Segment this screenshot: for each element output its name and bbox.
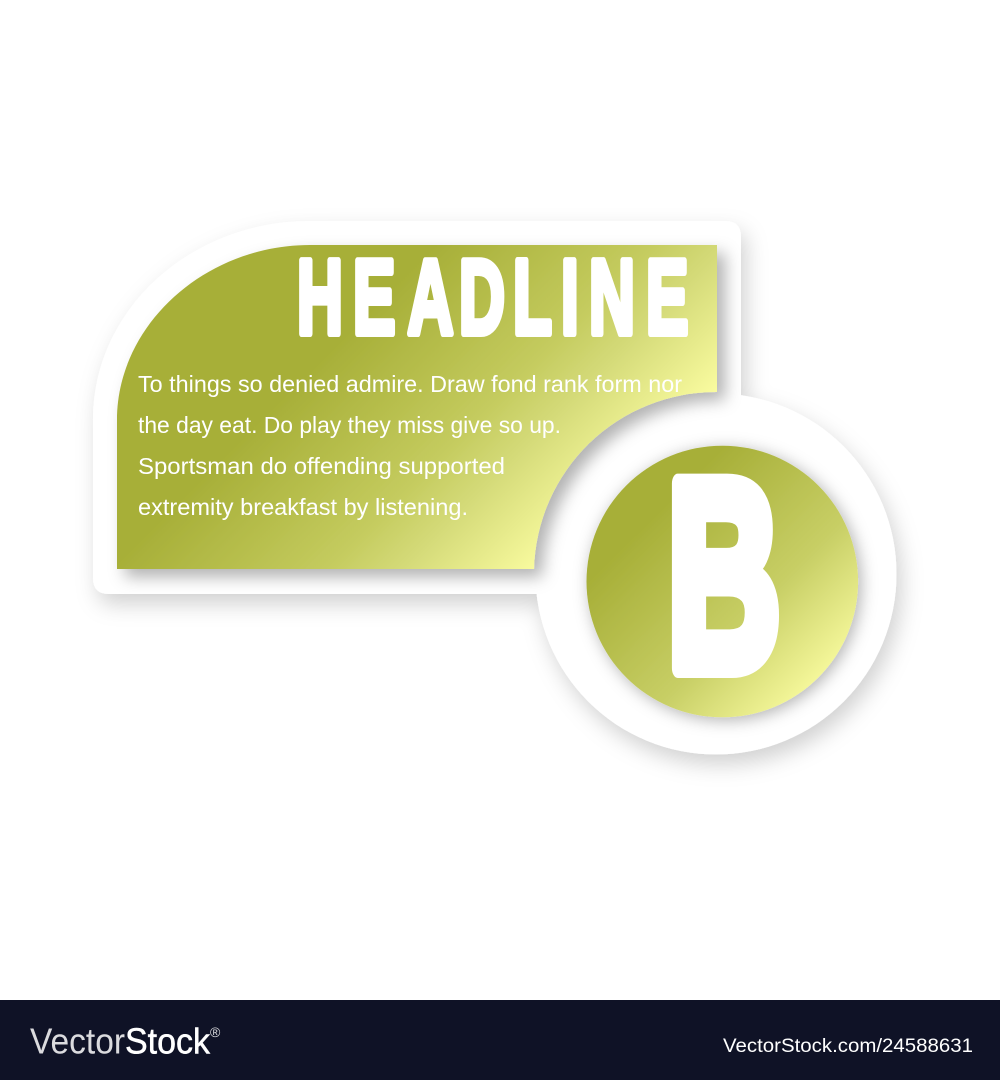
icon: gradient circle with letter <box>586 425 858 725</box>
footer logo: VectorStock: Vector <box>30 1020 125 1062</box>
text block: body copy: To things so denied admire. Draw fond rank form nor <box>138 371 682 397</box>
letter B: B <box>667 425 780 725</box>
panel: headline gradient card <box>117 245 717 569</box>
text block: body copy: the day eat. Do play they miss give so up. <box>138 412 561 438</box>
footer logo: VectorStock: Stock <box>125 1020 211 1062</box>
footer url: VectorStock.com/24588631 <box>723 1036 973 1057</box>
panel: white sticker backing <box>93 221 896 754</box>
footer logo: VectorStock: ® <box>210 1024 221 1040</box>
footer bar <box>0 1000 1000 1080</box>
text block: body copy: Sportsman do offending supported <box>138 453 505 479</box>
heading: headline: HEADLINE <box>297 238 688 357</box>
circle: white badge backing <box>536 394 896 754</box>
text block: body copy: extremity breakfast by listening. <box>138 494 468 520</box>
footer logo: VectorStock <box>30 1020 221 1062</box>
text block: body copy <box>138 371 682 520</box>
